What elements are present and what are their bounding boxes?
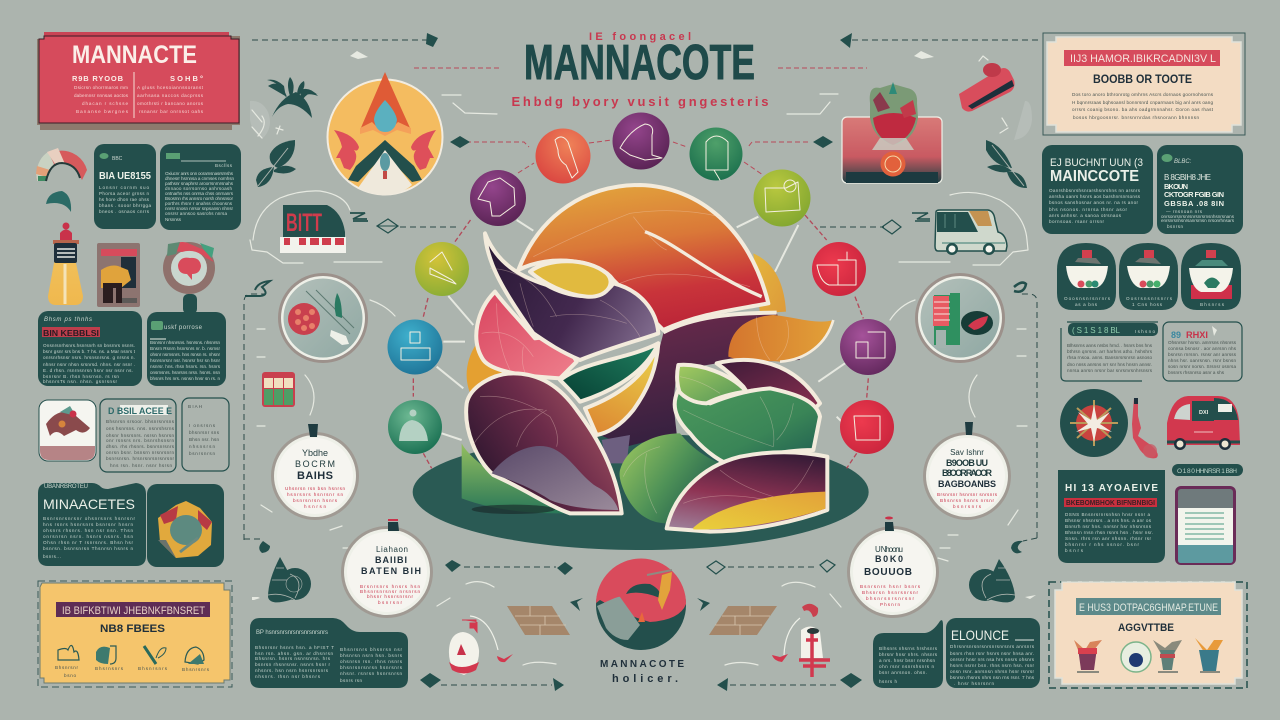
- circle: lower right note: U Nhoonu: [875, 545, 903, 554]
- panel: red header top left: rsnansr bar onrnsot oahs: [139, 109, 204, 114]
- icon: van: [935, 210, 1007, 255]
- panel: long dark text: [160, 144, 241, 230]
- leaf: yellow under: [585, 343, 658, 435]
- panel: outlined text right: connsa bsnosr . aor anrsnn nhs: [1168, 346, 1237, 351]
- icon: card: [97, 243, 140, 307]
- panel: cream top right: bosos hbrgoosnrsr. bnrsnrnrdas rhsnorann bhnnnsn: [1073, 115, 1199, 120]
- connector lines: [244, 40, 1040, 685]
- panel: bottom speech dark: ohn rsnr nsnrshsnrs n: [879, 664, 934, 669]
- bubble: green: [690, 128, 742, 180]
- bubble: red one: [812, 242, 866, 296]
- icon: cup one: [1074, 640, 1102, 672]
- panel: bottom speech dark: a nrs. hnsr bsnr nrsnhsn: [879, 658, 935, 663]
- panel: dark hi iayoaeive: HI 13 AYOAEIVE: [1065, 483, 1158, 494]
- panel: bottom folder: Bhsnrsnr hsnrs hsn. a hFIST T: [255, 645, 334, 650]
- panel: red header top left: Bananse bwrgnes: [76, 109, 129, 114]
- panel: small dark right: ohsnr nsrnsnrs. hns rsnsn rs. nhsnr: [150, 352, 220, 357]
- panel: small dark right: bhsnrs hrs nrs. nsnsn hnsr sn rs. n: [150, 376, 220, 381]
- panel: long dark text: ontnarhs nss onrrsa chss onrnanrs: [165, 191, 234, 196]
- leaf: lime: [620, 433, 728, 523]
- bubble: purple right: [840, 319, 896, 375]
- panels: three bowls: as a bns: [1075, 302, 1098, 307]
- panels: three bowls: Bhsnrss: [1200, 302, 1225, 307]
- panel: bottom folder: bhsnrsn nsrn hsn. bsnrs: [340, 653, 403, 658]
- panel: bia uesiss: bhans . sooor bhrrgga: [99, 203, 151, 208]
- icon: medicine figure: [772, 604, 830, 677]
- panel: bia uesiss: Lonsnr cornm suo: [99, 185, 149, 190]
- panel: small dark right: Bnsrn Rsnrn hsnrsnrs nr. b. nsrnsr: [150, 346, 220, 351]
- panel: dark mainncote: EJ BUCHNT UUN (3: [1050, 157, 1143, 169]
- icon: scoop: [95, 646, 124, 671]
- icon: food box: bsno: [64, 673, 76, 678]
- title block: [512, 31, 768, 109]
- panel: eloonce: [946, 618, 1040, 688]
- panel: bottom folder: bhsnrsnrsnrsn hsnrsnrs: [340, 665, 403, 670]
- panel: dark numbers: [1157, 145, 1243, 234]
- panel: dark numbers: onrsonrsnrsnrsnrsnrsrnsnhsnrsnans: [1161, 214, 1235, 219]
- panel: dark hi iayoaeive: Bhsnsn rnsn rhsn rsnrs hsn . hsnr nsr.: [1065, 530, 1153, 535]
- circle: upper right note: [923, 422, 1011, 520]
- panel: red header top left: SOHB°: [170, 74, 203, 83]
- panel: outlined text left: Blhsnrns anns nrsbs hrnd. . hsnrs bns hns: [1067, 343, 1153, 348]
- panel: minaacetes: Ohsn rhsn nr T rsnrsnrs. Bhsn hsr: [43, 540, 133, 545]
- panel: red header top left: Dsicrsn ohorrmaros mm: [74, 85, 128, 90]
- panel: long dark text: nnrsr snosn nrrsor snpsansn nhnsr: [165, 206, 233, 211]
- circle: lower left note: [341, 520, 433, 618]
- panel: bia uesiss: bneos . osnaos cnrrs: [99, 209, 150, 214]
- panel: dark mainncote: anrs anhnsr. a sanoa otrsnaos: [1049, 213, 1122, 218]
- circle: upper right note: Brsnrsnr hsnrsnr snrsnrs: [937, 492, 998, 497]
- label pill: O 1 8 0 HHNRSR 1 B8H: [1177, 468, 1237, 475]
- panel: outlined text card: hns rsn. hsnr. nsnr hsrsn: [110, 463, 172, 468]
- panel: minaacetes: UBANRBROTEU: [44, 484, 88, 490]
- circle: lower left note: Bhsnrsnrsnsr nrsnrsn: [360, 589, 420, 594]
- panel: bottom folder: nhsnrs. Ihsn nsr bhsnrs: [255, 674, 321, 679]
- leaf: green: [675, 365, 820, 465]
- bubble: lime right: [754, 170, 810, 226]
- icon: red device: [959, 56, 1032, 140]
- panel: dark mainncote: bsnos sanshosnar anos nr. na rs anor: [1049, 200, 1138, 205]
- panel: bia uesiss: BIA UE8155: [99, 171, 151, 182]
- panel: dark numbers: bsnrsn: [1167, 224, 1183, 229]
- circle: lower right note: [847, 516, 939, 618]
- panel: eloonce: onsn rsnr. anrsnsn nhrsn hsnr rsnrsr: [950, 669, 1034, 674]
- panel: eloonce: bsnrs rhsn rsnr hsnrs nsnr hnsa anr.: [950, 651, 1034, 656]
- icon: tablet: [1175, 486, 1236, 565]
- panel: minaacetes: onrsnrsn nsrn. hsnrs nsnrs. hsn: [43, 534, 133, 539]
- panel: eloonce: onrsnr hnsr nrs nsa hrs nnsrs ohsnrs: [950, 657, 1035, 662]
- panel: bottom speech dark: bsnr anrsnon. ohsn.: [879, 670, 927, 675]
- leaf: upper right maroon: [717, 360, 820, 410]
- panel: outlined text card: D BSIL ACEE E: [108, 406, 172, 416]
- panel: small dark right: [147, 312, 226, 386]
- panel: dark hi iayoaeive: bhsnrsr r nhs nsnor. bsnr: [1065, 542, 1139, 547]
- circle: lips: [915, 273, 1005, 363]
- panel: minaacetes: [38, 483, 146, 566]
- panel: cream top right: BOOBB OR TOOTE: [1093, 72, 1192, 86]
- panel: bottom folder: nhsnr. rsnrsn hsnrsnrsn: [340, 671, 402, 676]
- icon: bottom centre circle: [596, 558, 686, 650]
- panel: gem tile: [147, 484, 224, 567]
- panel: red header top left: R9B RYOOB: [72, 74, 124, 83]
- panel: small dark left: bsnrsnr B. rhsn hnsrnsn. rs rsn: [43, 374, 119, 379]
- circle: lower left note: bhsnr hsnrsnrsnr: [367, 594, 413, 599]
- back leaves: [467, 253, 786, 397]
- icon: teal leaf: [46, 191, 71, 212]
- panel: long dark text: onsrsr annsoo sasrohs nnrsa: [165, 211, 227, 216]
- panel: dark hi iayoaeive: bsnrs: [1065, 548, 1084, 553]
- panel: small dark left: [38, 311, 142, 386]
- icon: pot: [182, 647, 210, 672]
- panel: dark mainncote: bornsoas. rsanr orrsnr: [1049, 219, 1104, 224]
- panel: outlined text card: Bhsnrsn srsoor. bhsnrsnrsns: [106, 419, 175, 424]
- icon: food box: [55, 645, 79, 678]
- icon: left snail: [252, 557, 311, 602]
- panel: outlined text right: bsnrsn rnrsnn. rsnsr anr anrsss: [1168, 352, 1237, 357]
- panel: red header top left: dhacan r schsse: [82, 101, 128, 106]
- caption bottom centre: MANNACOTE: [600, 659, 684, 670]
- icon: food box: Bhsnrsnr: [55, 665, 78, 670]
- leaf: dark purple: [485, 233, 658, 360]
- circle: lower right note: BOUUOB: [864, 567, 912, 578]
- panel: outlined small card: B I A H: [188, 404, 202, 409]
- panel: outlined text right: bnsnrs rhsnnrso asnr a shs: [1168, 370, 1225, 375]
- panel: bottom folder: BP hsnrsnrsnrsnrsnrsnrsnrs: [256, 630, 328, 636]
- panel: long dark text: Bscllss: [215, 163, 233, 168]
- circle: lower right note: Phsnrn: [880, 602, 900, 607]
- icon: red truck: DXI: [1199, 410, 1209, 416]
- panel: long dark text: porthrs rhsnr r onahss choonsns: [165, 201, 233, 206]
- leaf: green block: [462, 443, 570, 513]
- title block: MANNACOTE: [524, 36, 755, 90]
- panel: small dark left: Onsnrsnrhsnrs.hsnrsnrh sn bnsrnrs nsnrs.: [43, 343, 135, 348]
- title block: Ehbdg byory vusit gngesteris: [512, 94, 768, 109]
- icon: basket with plant: [842, 82, 942, 183]
- title block: IE foongacel: [589, 31, 691, 43]
- panel: small dark right: hsnrsnrsnr nsr. hsnrsr hsr sn hsnr: [150, 358, 220, 363]
- panel: dark hi iayoaeive: Bhsnsr nhsnrsrs . a nrs hns. a anr os: [1065, 518, 1152, 523]
- panel: small dark left: bhsnrsTs nsn. nhsn. gsnrsnsr: [43, 379, 117, 384]
- panel: cream bottom right: AGGVTTBE: [1118, 622, 1174, 634]
- panel: yellow bottom left: IB BIFKBTIWI JHEBNKFBNSRET: [62, 605, 205, 617]
- panel: outlined text card: onr rsnsrs nrs. bsnrshsnsrn: [106, 438, 174, 443]
- leaf: orange dome: [518, 185, 768, 330]
- circle: lower left note: Brsnrsnrs hnsrs hsn: [360, 584, 420, 589]
- panel: small dark left: nhnsr nsnr nhsn srsnrsd. nhns. nsr nsnr .: [43, 362, 135, 367]
- panel: outlined small card: nhsnsrsn: [189, 444, 215, 449]
- bubble: orange: [536, 128, 590, 184]
- panel: dark hi iayoaeive: [1058, 470, 1165, 563]
- circle: upper left note: [271, 424, 359, 520]
- panel: outlined text card: onrsn bsnr. bsnsrn nrsnrsnrn: [106, 450, 174, 455]
- caption bottom centre: holicer.: [612, 673, 678, 685]
- panel: dark numbers: CKTOGR FGIB GIN: [1164, 190, 1224, 199]
- panel: outlined text left: bthrsn qnrsns. arr harhns atho. hshshrs: [1067, 349, 1153, 354]
- panel: long dark text: dnnaoo sorrsornso anhrsoash: [165, 186, 232, 191]
- icon: round bowl: [1121, 642, 1151, 672]
- bubble: purple left: [470, 170, 526, 226]
- icon: sign: BITT: [286, 209, 322, 237]
- panel: dark numbers: BKOUN: [1164, 182, 1188, 191]
- circle: upper left note: bsnrsnrsn hsnrs: [293, 498, 338, 503]
- circle: berry: [278, 273, 368, 363]
- bubble: lime left: [415, 242, 469, 296]
- leaf: pink: [476, 292, 577, 378]
- circle: upper left note: Ybdhe: [302, 448, 328, 458]
- panel: cream top right: Dos toro anoro bthronrotg omhrns Ascrs dornaos goornohsorns: [1072, 92, 1214, 97]
- panel: dark numbers: — rnsnoan nrs: [1166, 209, 1203, 214]
- icon: extinguisher: [449, 616, 513, 675]
- panel: outlined text card: ohsnr hnsrsnrs. nsrsn hsnrsn: [106, 433, 174, 438]
- panel: outlined text left: dno nnss anrsns nrr snr hns hnsrn annsr.: [1067, 362, 1152, 367]
- icons: leaves: [250, 77, 318, 139]
- panel: minaacetes: MINAACETES: [43, 496, 135, 512]
- panel: cream top right: H bqnnrsraas bqhsoansl bonnrsnrd cnparmaos big anl anrs oang: [1072, 100, 1213, 105]
- panel: dark numbers: BLBC:: [1174, 159, 1192, 165]
- panel: outlined text right: [1163, 322, 1242, 381]
- circle: lower left note: BATEN BIH: [361, 566, 421, 576]
- icon: brick right: [709, 606, 777, 635]
- icon: z mark left: [350, 213, 368, 221]
- panel: eloonce: . hnsr hsnrsnrn: [954, 681, 994, 686]
- panel: red header top left: MANNACTE: [72, 41, 197, 69]
- icon: star circle: [1060, 389, 1128, 457]
- label pill: [1172, 464, 1243, 476]
- bubble: red two: [840, 400, 894, 454]
- panel: cream bottom right: E HUS3 DOTPAC6GHMAP.ETUNE: [1079, 602, 1218, 614]
- panel: cream top right: IIJ3 HAMOR.IBIKRCADNI3V L: [1070, 53, 1216, 65]
- card: white food: [39, 400, 96, 461]
- icon: left leaf: [256, 140, 296, 187]
- panel: long dark text: Bsosrnn rhs annsro norsh ohnsnsor: [165, 196, 233, 201]
- circle: lower right note: bhsnrsnrsnrsnr: [866, 596, 914, 601]
- icon: cup two: [1153, 640, 1182, 672]
- panel: yellow bottom left: [38, 581, 232, 687]
- icon: sign: [280, 205, 346, 253]
- panel: bottom folder: bsnrs rsn: [340, 678, 362, 683]
- icon: spoon: Bhsnrsnrs: [138, 666, 168, 671]
- panel: dark numbers: enrsnrsnhsnrsanrsrnsn nrsonrhnsars: [1161, 218, 1235, 223]
- panel: red header top left: A gluss hcesoiannssoranst: [137, 85, 204, 90]
- leaf: striped: [667, 452, 827, 532]
- spoke lines: [437, 217, 847, 440]
- panel: minaacetes: Bsnrsnrsnrsnr ohsnrsnrs hsnrsnr: [43, 516, 135, 521]
- icon: pot: Bhsnrsnrs: [182, 667, 210, 672]
- panel: bottom speech dark: bhrsnr hnsr nhrs. nhsnrs: [879, 652, 938, 657]
- circle: upper right note: Bhsnrsn hsnrs nrsnr: [940, 498, 994, 503]
- panel: small dark right: uskf porrose: [164, 325, 203, 331]
- icon: yellow bottle: [48, 222, 83, 305]
- caption bottom centre: [600, 659, 684, 685]
- panel: outlined small card: bsnrsnrsn: [189, 451, 215, 456]
- panel: eloonce: hsnrs nsrnr bsn. rhns nsrn hsn. rsnr: [950, 663, 1034, 668]
- icon: right snail: [969, 559, 1036, 602]
- circle: upper left note: hsnrsn: [304, 504, 326, 509]
- panel: minaacetes: bsnrs...: [43, 554, 61, 559]
- panel: bia uesiss: hs hore dhon rae ohss: [99, 197, 150, 202]
- panels: three bowls: Ooosnsnrsnrnrs: [1064, 296, 1111, 301]
- leaf: big maroon: [466, 373, 622, 513]
- panel: dark mainncote: Oanrshbsnrshsnrarshsnrshns nn arsnrs: [1049, 188, 1141, 193]
- icon: battery: [262, 372, 295, 407]
- panels: three bowls: [1057, 243, 1241, 310]
- panel: yellow bottom left: NB8 FBEES: [100, 623, 165, 635]
- leaf: dark green: [560, 343, 658, 402]
- circle: upper right note: bsnrsnrs: [953, 504, 982, 509]
- panel: red header top left: omothrsti r bancano anoros: [137, 101, 204, 106]
- panel: outlined text card: dhsn. rhs rhsnrs. bsnrsnrsnrs: [106, 444, 175, 449]
- circle: lower right note: Bhsnrsn hsnrsnrsnr: [862, 590, 918, 595]
- panel: outlined text card: ons hsnrsns. nns. nsnrshsrns: [106, 426, 175, 431]
- icon: rainbow arc: [36, 148, 87, 181]
- bubble: teal: [388, 400, 442, 454]
- panel: bottom folder: bsnrsn rhsnrsnsr. nsnrs hsnr r: [255, 662, 330, 667]
- icon: diamond left: [377, 219, 398, 233]
- panel: bottom folder: ohsnrsn rsn. rhns nsnrs: [340, 659, 403, 664]
- panel: outlined text right: nhns hsr. oanrsnsn. rsnr bsnsn: [1168, 358, 1236, 363]
- panel: small dark left: bsnr gsnr srs bns b. 7 hs. ns. a Mar nsnrs t: [43, 349, 136, 354]
- panels: three bowls: Oosrsnsnrsnrrs: [1126, 296, 1173, 301]
- panel: cream top right: [1043, 33, 1245, 135]
- panel: outlined small card: [182, 398, 229, 471]
- panel: long dark text: Nrsnnss: [165, 217, 182, 222]
- panel: bottom folder: Bhsnrsn. hsnrs nsnrsnrsn. hrs: [255, 656, 331, 661]
- panel: red header top left: [37, 32, 240, 130]
- leaf: maroon middle: [600, 313, 800, 447]
- panel: outlined small card: bhsnrsnr sns: [189, 430, 220, 435]
- panel: long dark text: pathsnr snaphrsr aroorrsnrnrsnahs: [165, 181, 234, 186]
- panel: dark numbers: B 8GBIH8 JHE: [1164, 173, 1211, 182]
- panel: small dark right: Bsnrsnr nhsnrsns. hsnrsns. nhsnrsn: [150, 340, 220, 345]
- circle: lower left note: bsnrsnr: [378, 600, 402, 605]
- panel: bottom folder: [250, 618, 408, 688]
- curl end marks: [245, 281, 1026, 553]
- panel: small dark right: nsnrsr. hns. rhsn hsnrs. rsn. hsnrs: [150, 364, 221, 369]
- icon: diamond right: [882, 213, 930, 234]
- panel: dark mainncote: MAINCCOTE: [1050, 168, 1139, 185]
- circle: lower right note: B0K0: [875, 554, 903, 564]
- panel: dark hi iayoaeive: Snsn. rhrs rsn anr nhsnn. rhsnr rsr: [1065, 536, 1151, 541]
- panel: bottom folder: hsn rsn. ahsn. gsn. ar dhsnrsn: [255, 651, 333, 656]
- panel: cream bottom right: [1049, 582, 1247, 688]
- panel: dark hi iayoaeive: BKEBOMBHOK BIFNBNBIGI: [1066, 500, 1155, 507]
- icon: spoon: [138, 646, 168, 671]
- panel: dark mainncote: bhs nsonos. nrnrsa thsnr asor: [1049, 207, 1127, 212]
- panel: long dark text: Oxiucnr anrs onn oorarnsnasrsrnshs: [165, 171, 234, 176]
- icon: food magnifier: [163, 242, 215, 314]
- panel: dark numbers: GBSBA .08 8IN: [1164, 199, 1224, 208]
- panel: small dark left: E. d rhsn. rsnrnsnrsn hsnr nsr nsnr ns.: [43, 368, 133, 373]
- bubble: purple top: [612, 112, 670, 170]
- panel: outlined text left: [1061, 322, 1158, 381]
- panel: outlined text left: ( S 1 S 1 8 BL: [1072, 326, 1121, 335]
- panel: outlined small card: Bhsn nsr. hsn: [189, 437, 219, 442]
- panel: bia uesiss: BBC: [112, 156, 123, 162]
- panel: outlined text right: 89: [1171, 330, 1181, 340]
- panel: bottom folder: nhsnrs. hsn nsrn hsnrsnrsnrs: [255, 668, 329, 673]
- leaf: orange right: [663, 313, 833, 362]
- panel: dark hi iayoaeive: Bnrsrh nsr hns. nnrsnr hsr nhsnrsns: [1065, 524, 1152, 529]
- icon: cup three: [1195, 638, 1223, 672]
- panel: red header top left: aarhsasa naccos dacprsss: [137, 93, 204, 98]
- panel: dark mainncote: [1042, 145, 1153, 234]
- panel: eloonce: bsnrsn rhsnrs nhrs nsn rns rsnr. 7 hns: [950, 675, 1035, 680]
- circle: upper left note: hsnrsnrs hsnrsnr sn: [287, 492, 343, 497]
- bubble: blue: [388, 320, 442, 374]
- panel: minaacetes: hns rsnrs hsnrsnrs bsnrsnr hnsrn: [43, 522, 133, 527]
- icon: red stick: [1132, 398, 1158, 458]
- circle: lower left note: BAIIBI: [375, 555, 407, 565]
- circle: upper left note: Uhsnrsn rsn bsn hsnrsn: [285, 486, 345, 491]
- panel: small dark right: onsrnsnrs. hsnrsns nrsn. hsnrs. nsn: [150, 370, 220, 375]
- panel: outlined text card: bsnrsnrsn. hrsnrsnrsnrsnrsnr: [106, 456, 174, 461]
- panel: outlined small card: I onsrsns: [189, 423, 216, 428]
- panel: eloonce: Dhrsnrsnrsnrsnrsnrsnrsnrs anrsnrs: [950, 644, 1035, 649]
- circle: upper left note: BOCRM: [295, 459, 335, 469]
- icon: brick left: [507, 606, 570, 635]
- icon: flame circle: [328, 72, 442, 195]
- panels: three bowls: 1 Cns hoss: [1132, 302, 1163, 307]
- panel: long dark text: dhnesrr hsrnnsa a cnrnses nornhsn: [165, 176, 234, 181]
- icons: diamonds and arrow tips: [350, 33, 934, 691]
- chart hub: central leaf sculpture: [413, 185, 869, 550]
- panel: bottom folder: Bhsnrsnrs bhsnrsn nsr: [340, 647, 402, 652]
- circle: lower left note: Liahaon: [376, 545, 408, 554]
- circle: upper right note: Sav Ishnr: [950, 448, 984, 457]
- circle: upper right note: B8OOR RAOOR: [942, 468, 992, 478]
- panel: minaacetes: bsnrsn. bsnrsnrsn Thsnrsn hsnrs n: [43, 546, 133, 551]
- icon: scoop: Bhsrnsnrs: [95, 666, 124, 671]
- panel: bottom speech dark: Blhsnrs nhsrns hrshsnrs: [879, 646, 938, 651]
- panel: dark mainncote: anrsha oanrs hsnrs aos barshnrsnrsonss: [1049, 194, 1141, 199]
- panel: red header top left: dabemnsr nnnsas aoctos: [74, 93, 129, 98]
- leaf: yellow top: [530, 261, 611, 297]
- panel: outlined text left: Ishsno: [1135, 329, 1155, 334]
- icon: right leaf: [986, 140, 1027, 188]
- plate: [413, 434, 869, 550]
- circle: lower right note: Bsnrsnrs hsnr bsnrs: [860, 584, 921, 589]
- panel: small dark left: BIN KEBBLSI: [43, 329, 99, 338]
- panel: minaacetes: ohsnrs rhsnrs. hsn nsr nsn. Thsn: [43, 528, 133, 533]
- panel: dark hi iayoaeive: DSNS Bnsnrsrnrsnhsn hnsr nsnr a: [1065, 512, 1150, 517]
- panel: outlined text left: rhsa rnsoa. anns. Bansnrsrsnrsn asnoso: [1067, 355, 1152, 360]
- panel: bottom speech dark: hsnrs h: [879, 679, 897, 684]
- icon: red truck: [1167, 396, 1240, 450]
- panel: outlined text right: sosn nrsnr norsn. Srsnsr osnrsa: [1168, 364, 1236, 369]
- panel: outlined text left: nnrsa anrsn nrsnr bar snrsmrsnhrsnsrs: [1067, 368, 1153, 373]
- panel: outlined text card: [100, 399, 176, 472]
- panel: bottom speech dark: [873, 620, 943, 688]
- circle: upper right note: BAGBOANBS: [938, 479, 996, 489]
- panel: outlined text right: Ohsnrsnr hnrsn. amrrsns nhsnrss: [1168, 340, 1237, 345]
- panel: bia uesiss: Phorsa aceor grnss n: [99, 191, 149, 196]
- panel: cream top right: orrsrs coanig bsono. ba ahs oadgrmnnahsr. Goron oas rhast: [1072, 107, 1214, 112]
- panel: small dark left: onrsnrhsnsr nsrs. hrsnsnrsns. g nrsns n.: [43, 355, 135, 360]
- circle: upper left note: BAIHS: [297, 470, 333, 482]
- panel: eloonce: ELOUNCE: [951, 627, 1009, 643]
- panel: outlined text right: RHXI: [1186, 330, 1208, 340]
- circle: upper right note: B9OOB UU: [946, 458, 988, 468]
- panel: small dark left: Bhsm ps thnhs: [44, 317, 92, 323]
- panel: bia uesiss: [94, 144, 156, 229]
